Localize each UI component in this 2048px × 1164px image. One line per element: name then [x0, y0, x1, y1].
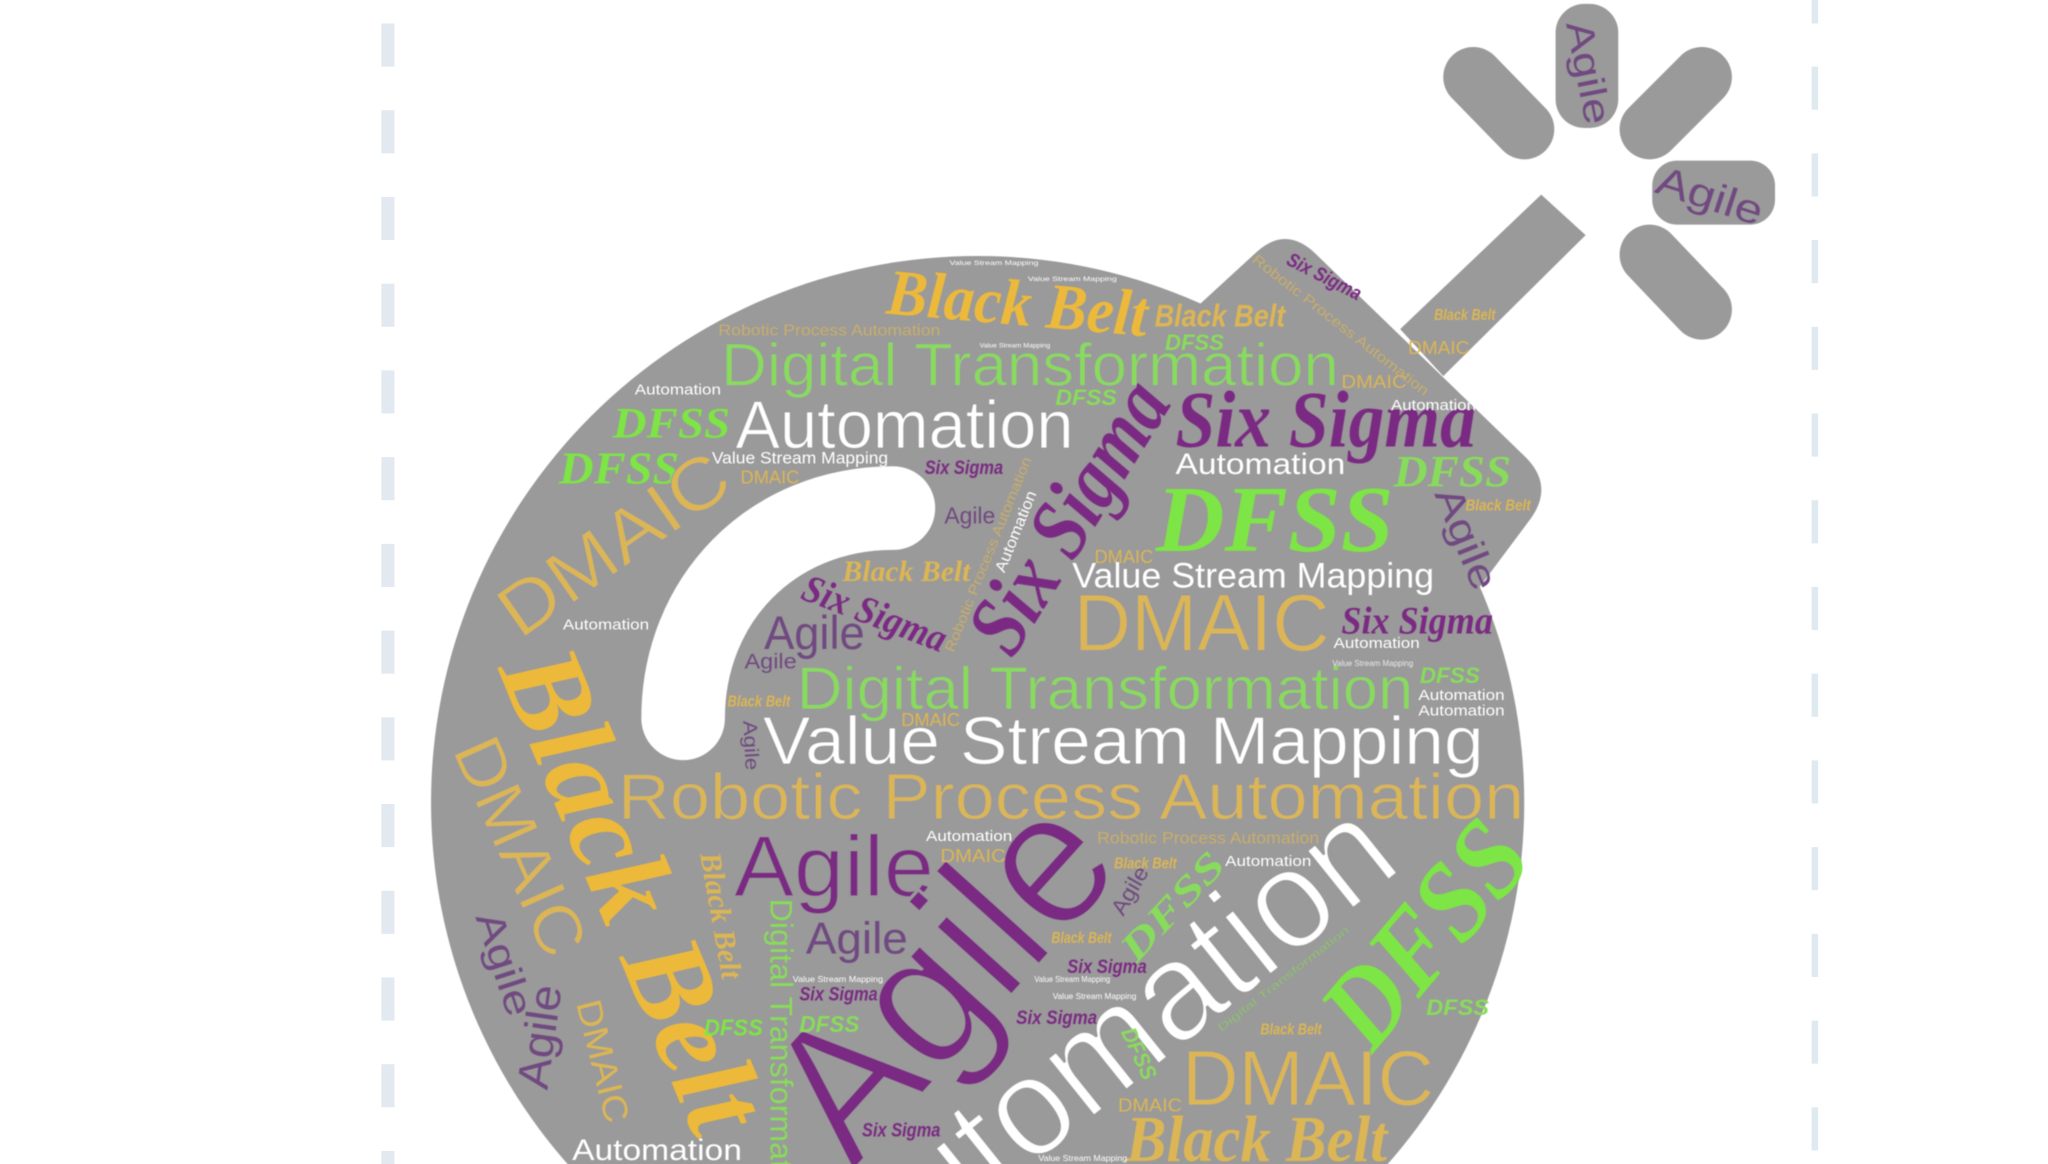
small script words: DFSS — [1426, 995, 1489, 1020]
spark: upper right — [1650, 77, 1702, 129]
spark: right — [1652, 161, 1775, 225]
small script words: Black Belt — [728, 694, 791, 711]
small sans words: Agile — [744, 651, 797, 674]
word: DFSS huge: DFSS — [1155, 468, 1394, 572]
small script words: DFSS — [1055, 385, 1117, 410]
small script words: DFSS — [1165, 330, 1224, 355]
word: Value Stream Mapping middle: Value Stream Mapping — [1072, 557, 1434, 596]
small sans words: Agile — [1106, 862, 1154, 919]
small sans words — [718, 252, 1469, 1115]
small white words: Value Stream Mapping — [1034, 975, 1110, 984]
small white words — [563, 260, 1505, 1163]
word: Black Belt beside highlight: Black Belt — [841, 555, 972, 588]
word: Six Sigma right: Six Sigma — [1341, 599, 1493, 642]
small sans words: Robotic Process Automation — [942, 455, 1035, 655]
small sans words: Robotic Process Automation — [1097, 829, 1319, 848]
small script words: Six Sigma — [862, 1119, 940, 1141]
small script words: DFSS — [704, 1015, 763, 1041]
small script words: Six Sigma — [799, 983, 878, 1005]
word: DMAIC rotated upper left: DMAIC — [483, 435, 745, 653]
word: Automation large top: Automation — [735, 388, 1074, 463]
small script words: Six Sigma — [925, 457, 1003, 479]
small script words: Black Belt — [1434, 307, 1496, 324]
word: DFSS giant rotated: DFSS — [1295, 797, 1554, 1072]
small white words: Automation — [1418, 704, 1505, 720]
word: Automation upper right: Automation — [1176, 448, 1345, 481]
small white words: Value Stream Mapping — [793, 975, 883, 984]
small white words: Value Stream Mapping — [712, 449, 888, 468]
right dashed margin line — [1812, 0, 1818, 1150]
spark: top — [1556, 4, 1618, 128]
small white words: Automation — [926, 829, 1012, 845]
word: Agile on right edge: Agile — [1426, 481, 1506, 596]
word: DFSS left pair: DFSS — [558, 442, 679, 493]
small white words: Automation — [992, 489, 1040, 575]
small white words: Automation — [1334, 636, 1420, 652]
word: Digital Transformation centre: Digital Transformation — [797, 655, 1413, 722]
word: Digital Transformation top: Digital Transformation — [721, 331, 1339, 398]
bomb body — [431, 256, 1524, 1164]
small white words: Automation — [1391, 398, 1476, 414]
word: Agile medium: Agile — [734, 819, 934, 915]
small white words: Value Stream Mapping — [1332, 659, 1413, 668]
word: DFSS rotated centre: DFSS — [1111, 843, 1234, 971]
small script words: Black Belt — [1465, 498, 1531, 515]
small white words: Automation — [563, 618, 649, 634]
word: Robotic Process Automation large: Robotic Process Automation — [618, 760, 1524, 833]
small white words: Value Stream Mapping — [950, 260, 1039, 267]
bomb neck — [1176, 239, 1541, 627]
word: Value Stream Mapping large: Value Stream Mapping — [763, 704, 1484, 779]
word: Black Belt giant rotated: Black Belt — [473, 627, 793, 1154]
word: DFSS left pair — [558, 408, 729, 484]
small script words — [704, 249, 1531, 1141]
small script words: Black Belt — [1155, 299, 1287, 334]
word: Agile beside highlight: Agile — [764, 606, 865, 659]
word: Agile reading down, lower left: Agile — [467, 906, 541, 1022]
bomb highlight cut-out — [683, 508, 893, 718]
small white words: Value Stream Mapping — [1053, 992, 1136, 1001]
bomb silhouette — [431, 4, 1775, 1164]
small script words: DFSS — [1116, 1023, 1162, 1084]
word: Agile on top spark: Agile — [1557, 17, 1618, 128]
fuse — [1400, 195, 1586, 376]
word: DMAIC lower right: DMAIC — [1182, 1034, 1434, 1122]
word: Black Belt top: Black Belt — [883, 257, 1152, 351]
spark: upper left — [1473, 77, 1524, 129]
small sans words: Agile — [944, 503, 995, 529]
small sans words: DMAIC — [901, 709, 960, 730]
small script words: Black Belt — [1114, 856, 1177, 873]
word: Six Sigma upper right: Six Sigma — [1176, 375, 1476, 465]
word: DMAIC centre: DMAIC — [1074, 578, 1330, 668]
small white words: Value Stream Mapping — [1038, 1154, 1127, 1163]
small script words: DFSS — [799, 1011, 860, 1037]
small script words: Black Belt — [1051, 930, 1112, 947]
word: Black Belt rotated, small: Black Belt — [693, 849, 748, 983]
word: Agile reading up, lower left: Agile — [509, 982, 572, 1092]
small white words: Value Stream Mapping — [1028, 276, 1117, 283]
small sans words: Agile — [738, 720, 763, 771]
small sans words: DMAIC — [1341, 371, 1407, 392]
small sans words: DMAIC — [741, 466, 799, 487]
small sans words: DMAIC — [940, 845, 1006, 866]
word: DFSS left pair: DFSS — [611, 401, 730, 448]
small script words: Six Sigma — [1067, 956, 1147, 978]
small script words: DFSS — [1420, 663, 1480, 688]
small white words: Automation — [1225, 854, 1311, 870]
small white words: Automation — [635, 382, 721, 398]
word: Agile on right spark: Agile — [1651, 157, 1769, 234]
small script words: Black Belt — [1260, 1021, 1322, 1038]
small sans words: Robotic Process Automation — [1249, 252, 1432, 399]
word: Agile small: Agile — [806, 914, 908, 963]
word: DFSS right: DFSS — [1393, 446, 1511, 496]
small white words: Automation — [1418, 688, 1505, 704]
small script words: Six Sigma — [1283, 249, 1365, 305]
small script words: Six Sigma — [1016, 1007, 1097, 1029]
left dashed margin line — [381, 24, 394, 1164]
small sans words: DMAIC — [1118, 1094, 1182, 1115]
word: Six Sigma rotated: Six Sigma — [947, 362, 1189, 670]
word cloud — [438, 17, 1769, 1164]
word: DMAIC reading down, lower left: DMAIC — [568, 996, 636, 1127]
small white words: Value Stream Mapping — [980, 342, 1051, 349]
small sans words: DMAIC — [1408, 337, 1469, 358]
small sans words: Robotic Process Automation — [718, 323, 940, 340]
spark: lower right — [1650, 255, 1702, 310]
word: Six Sigma rotated beside highlight: Six Sigma — [796, 566, 953, 661]
word: DMAIC rotated lower left: DMAIC — [438, 725, 601, 968]
small sans words: DMAIC — [1095, 546, 1153, 567]
small sans words: Digital Transformation — [1216, 925, 1352, 1034]
